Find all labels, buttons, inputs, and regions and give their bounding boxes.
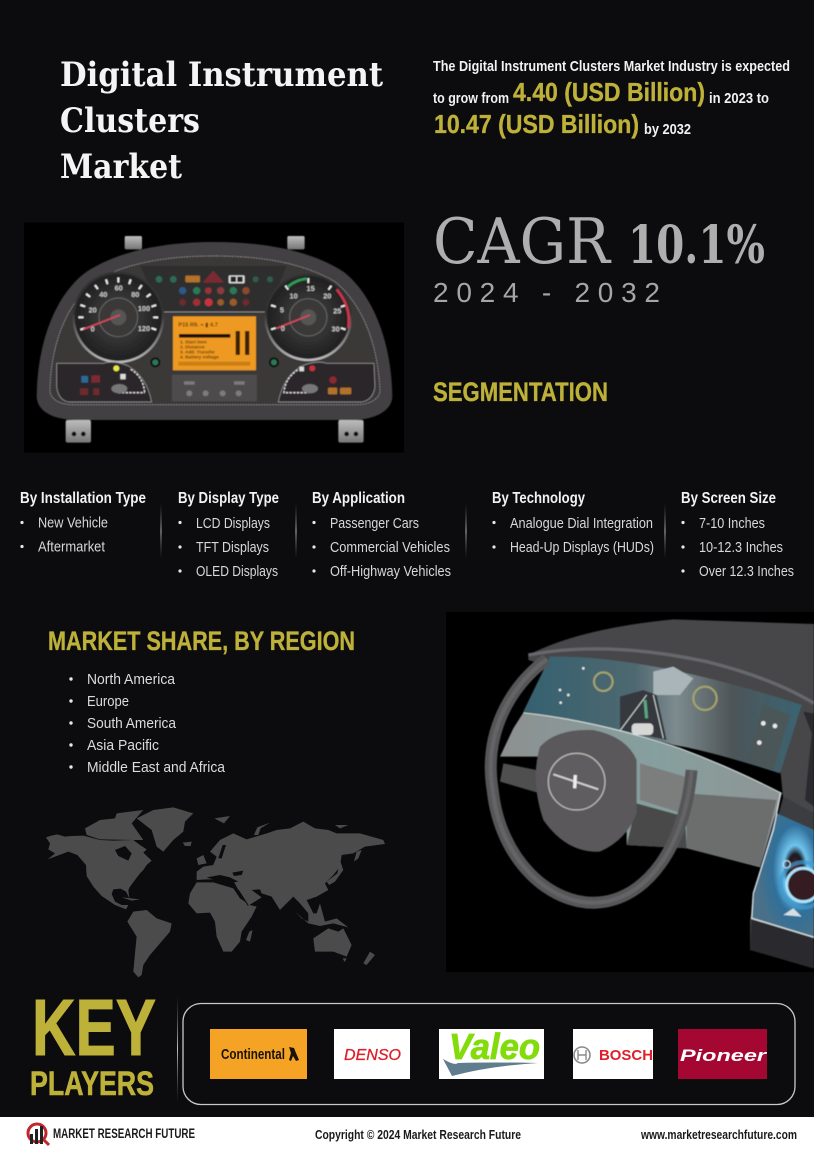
region list: North America — [87, 671, 176, 688]
CAGR figure: CAGR — [433, 205, 611, 278]
mounting brackets — [66, 236, 364, 443]
orange display: 1. Start item — [180, 339, 207, 344]
cluster housing — [37, 242, 392, 420]
vents and center stack — [803, 712, 814, 807]
world map — [46, 807, 385, 977]
orange display: P15 R9. ⌁ ▮ 4.7 — [178, 323, 218, 329]
control panel — [172, 375, 257, 401]
region list: South America — [87, 715, 177, 732]
market size statement: in 2023 to — [709, 90, 769, 107]
lower pods — [57, 362, 375, 402]
title: Clusters — [60, 101, 200, 141]
CAGR figure — [433, 205, 765, 308]
right gauge: 0 — [281, 324, 285, 333]
CAGR figure: 2024 - 2032 — [433, 277, 660, 308]
logo: Valeo: Valeo — [449, 1026, 540, 1067]
segmentation: by screen size: By Screen Size — [681, 490, 776, 507]
image: digital dashboard and steering wheel — [446, 612, 814, 972]
segmentation: by display type: OLED Displays — [196, 564, 278, 580]
logo: Continental: Continental — [221, 1046, 285, 1063]
steering wheel hub — [536, 730, 637, 852]
segmentation: by installation type — [20, 490, 146, 556]
left gauge: 80 — [131, 290, 139, 299]
segmentation: by technology: Head-Up Displays (HUDs) — [510, 540, 654, 556]
segmentation: by installation type: Aftermarket — [38, 540, 105, 556]
right gauge: 10 — [290, 291, 298, 300]
lower trim — [500, 713, 782, 867]
left gauge: 100 — [138, 304, 150, 313]
touch display — [752, 813, 814, 937]
segmentation: by screen size: 7-10 Inches — [699, 516, 765, 532]
title: Market — [60, 147, 182, 187]
right gauge: 5 — [280, 305, 284, 314]
steering wheel rim — [491, 659, 692, 903]
footer — [0, 1117, 814, 1150]
title: Digital Instrument — [60, 55, 383, 95]
orange display: 4. Battery voltage — [180, 355, 219, 360]
market size statement: 4.40 (USD Billion) — [513, 77, 705, 107]
segmentation: by screen size: 10-12.3 Inches — [699, 540, 783, 556]
segmentation: by technology — [492, 490, 654, 556]
logo: Denso — [334, 1029, 410, 1079]
segmentation: by technology: Analogue Dial Integration — [510, 516, 653, 532]
region list: Asia Pacific — [87, 737, 159, 754]
key players label: PLAYERS — [30, 1065, 154, 1103]
logo: Continental — [210, 1029, 307, 1079]
segmentation: by display type: By Display Type — [178, 490, 279, 507]
right gauge: 30 — [332, 324, 340, 333]
key players label: KEY — [32, 983, 156, 1072]
footer logo: MARKET RESEARCH FUTURE — [53, 1126, 195, 1141]
logo: Pioneer — [678, 1029, 768, 1079]
right gauge: 25 — [333, 306, 341, 315]
cluster screen — [523, 657, 802, 773]
warning lights — [156, 271, 273, 306]
market size statement — [433, 58, 790, 139]
orange display: 2. Distance — [180, 344, 205, 349]
orange display: 3. Add. Transfer — [180, 350, 215, 355]
footer logo — [28, 1124, 195, 1145]
segmentation: by screen size: Over 12.3 Inches — [699, 564, 794, 580]
left gauge: 120 — [138, 324, 150, 333]
left gauge: 60 — [115, 284, 123, 293]
left gauge — [71, 270, 166, 365]
segmentation: by technology: By Technology — [492, 490, 585, 507]
logo: Bosch: BOSCH — [599, 1047, 653, 1064]
segmentation: by display type: TFT Displays — [196, 540, 269, 556]
logo: Valeo — [439, 1026, 544, 1079]
key players label — [30, 983, 156, 1103]
logo: Denso: DENSO — [344, 1047, 401, 1064]
right gauge: 15 — [307, 284, 315, 293]
market size statement: 10.47 (USD Billion) — [434, 109, 639, 139]
segmentation: by installation type: New Vehicle — [38, 516, 108, 532]
image: instrument cluster — [24, 223, 404, 453]
dashboard top — [528, 619, 814, 813]
logo: Pioneer: Pioneer — [680, 1046, 768, 1065]
left gauge: 40 — [99, 290, 107, 299]
segmentation: by application — [312, 490, 451, 580]
segmentation: by application: By Application — [312, 490, 405, 507]
market size statement: by 2032 — [644, 121, 691, 138]
segmentation: by display type — [178, 490, 279, 580]
right gauge — [262, 271, 355, 364]
region list: Middle East and Africa — [87, 759, 226, 776]
heading: market share by region: MARKET SHARE, BY REGION — [48, 626, 355, 656]
region list — [69, 671, 226, 776]
region list: Europe — [87, 693, 129, 710]
segmentation: by application: Commercial Vehicles — [330, 540, 450, 556]
logo: Bosch — [573, 1029, 653, 1079]
segmentation: by screen size — [681, 490, 794, 580]
CAGR figure: 10.1% — [628, 215, 765, 276]
left gauge: 20 — [89, 305, 97, 314]
key players panel — [183, 1004, 795, 1104]
left gauge: 0 — [91, 325, 95, 334]
segmentation: by application: Passenger Cars — [330, 516, 419, 532]
segmentation: by installation type: By Installation Type — [20, 490, 146, 507]
footer: Copyright © 2024 Market Research Future — [315, 1127, 521, 1142]
title — [60, 55, 383, 187]
market size statement: to grow from — [433, 90, 509, 107]
right gauge: 20 — [323, 291, 331, 300]
segmentation: by application: Off-Highway Vehicles — [330, 564, 451, 580]
heading: segmentation: SEGMENTATION — [433, 377, 608, 407]
orange display — [173, 316, 256, 370]
segmentation: by display type: LCD Displays — [196, 516, 270, 532]
